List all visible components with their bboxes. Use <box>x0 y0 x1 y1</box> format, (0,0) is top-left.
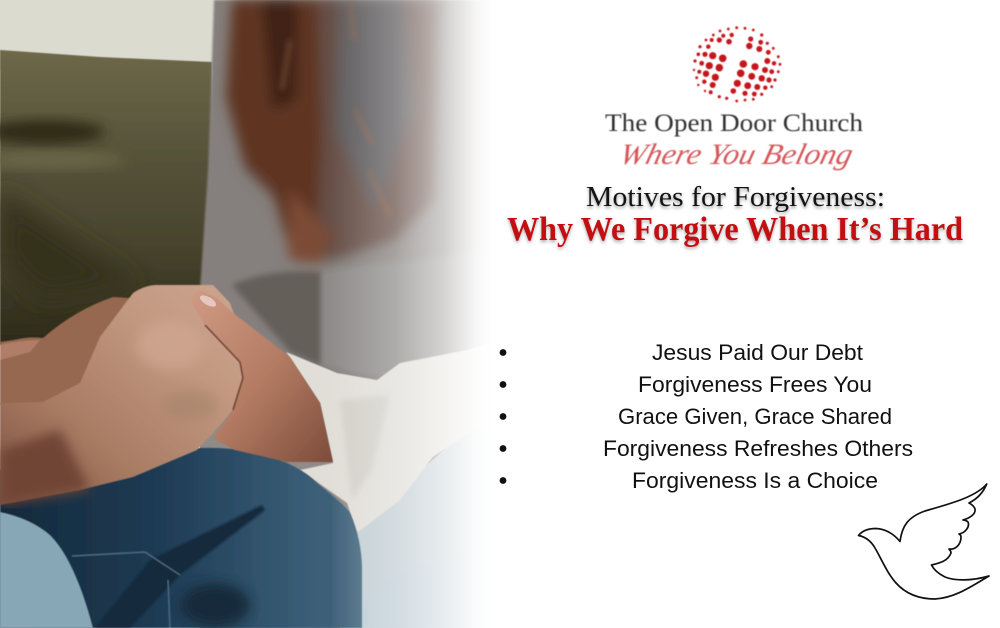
bullet 2 <box>500 372 872 397</box>
photo woman's grey sweater <box>199 0 478 374</box>
photo white sleeve <box>286 350 474 533</box>
bullet 1 <box>500 340 863 365</box>
photo man's hand and forearm <box>0 285 245 505</box>
photo hair highlights <box>282 0 390 215</box>
photo fingernail <box>200 295 216 307</box>
photo light denim right leg <box>362 553 500 628</box>
logo red dotted globe <box>693 26 781 102</box>
photo base behind figures <box>200 380 445 628</box>
bullet 3: Grace Given, Grace Shared <box>618 404 892 429</box>
heading line one: Motives for Forgiveness: <box>586 182 885 213</box>
heading line two: Why We Forgive When It’s Hard <box>507 211 963 248</box>
bullet list <box>500 340 913 493</box>
bullet 1: Jesus Paid Our Debt <box>652 340 863 365</box>
heading line one: Motives for Forgiveness: <box>586 184 885 215</box>
heading line two: Why We Forgive When It’s Hard <box>507 213 963 250</box>
logo tagline: Where You Belong <box>616 137 857 171</box>
photo olive sofa cushion <box>0 50 212 345</box>
photo: couple holding hands <box>0 0 500 628</box>
photo woman's thumb and wrist <box>191 291 333 462</box>
photo wall background <box>0 0 372 70</box>
bullet 4: Forgiveness Refreshes Others <box>603 436 913 461</box>
photo white fade overlay <box>330 0 492 628</box>
bullet 2: Forgiveness Frees You <box>638 372 872 397</box>
bullet 5: Forgiveness Is a Choice <box>632 468 878 493</box>
logo: The Open Door Church <box>605 26 864 171</box>
icon: dove outline <box>858 484 989 599</box>
bullet 5 <box>500 468 878 493</box>
heading <box>507 182 963 250</box>
photo woman's brown hair <box>226 0 440 264</box>
logo church name: The Open Door Church <box>605 110 864 137</box>
bullet 3 <box>500 404 892 429</box>
photo blue-white cushion <box>340 433 472 628</box>
photo woman's hand underneath <box>0 297 130 405</box>
photo light denim left leg <box>0 512 93 628</box>
photo dark denim knee <box>0 448 362 628</box>
